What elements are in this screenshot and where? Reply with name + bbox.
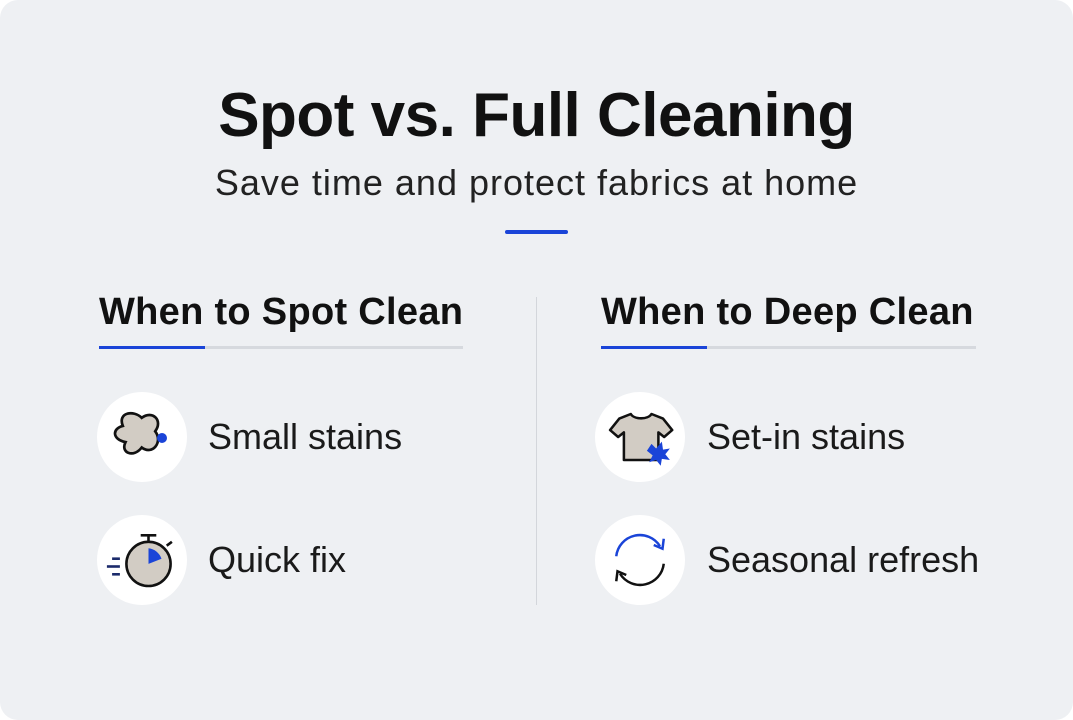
subtitle: Save time and protect fabrics at home [215, 162, 858, 203]
text: seasonal refresh: Seasonal refresh [707, 539, 979, 580]
text: quick fix: Quick fix [208, 539, 346, 580]
heading: deep clean: When to Deep Clean [601, 291, 974, 333]
icon: stain [97, 392, 187, 482]
text: set-in stains: Set-in stains [707, 416, 905, 457]
icon: shirt [595, 392, 685, 482]
heading: spot clean: When to Spot Clean [99, 291, 463, 333]
text: small stains: Small stains [208, 416, 402, 457]
icon: stopwatch [97, 515, 187, 605]
icon: refresh [595, 515, 685, 605]
title accent bar [505, 230, 568, 234]
title: Spot vs. Full Cleaning [218, 81, 855, 150]
divider [536, 297, 537, 605]
underline spot [99, 346, 463, 349]
underline deep [601, 346, 976, 349]
